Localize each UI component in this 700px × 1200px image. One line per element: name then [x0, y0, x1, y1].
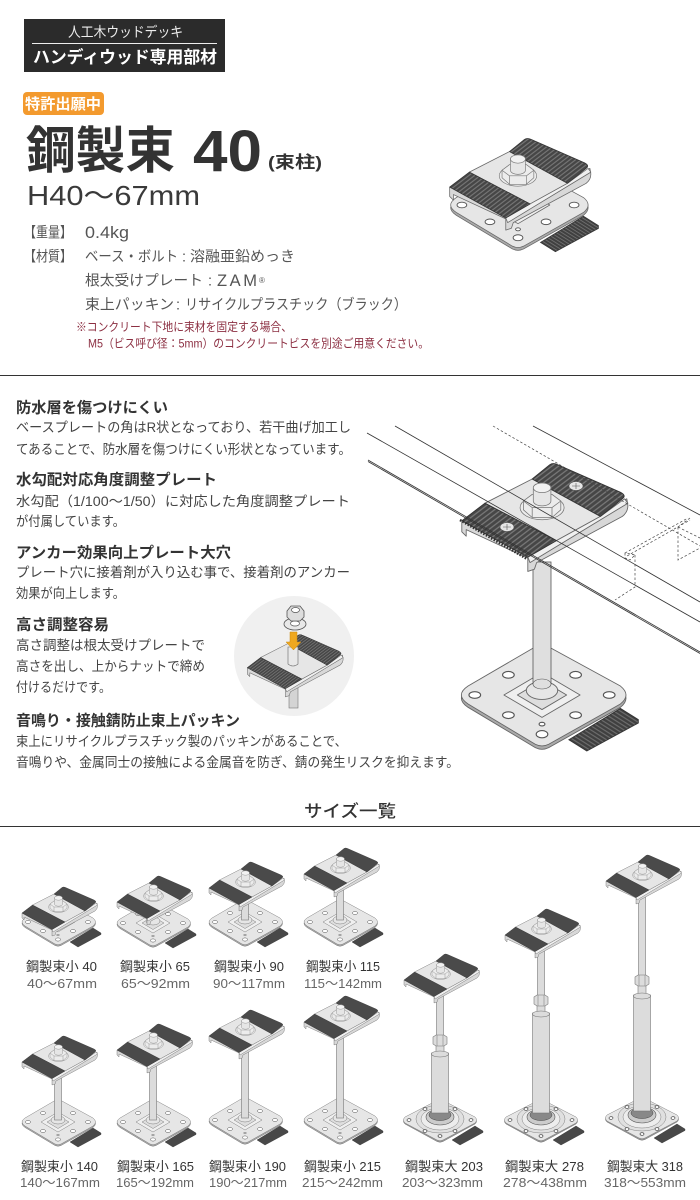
product: small 140: 鋼製束小 140 [21, 1159, 98, 1174]
feature text: anchor holes: プレート穴に接着剤が入り込む事で、接着剤のアンカー [16, 564, 350, 580]
feature text: height adjustment: 高さ調整容易 [16, 616, 109, 634]
product: small 115 [304, 848, 383, 991]
product: small 115: 鋼製束小 115 [306, 959, 380, 974]
product: small 65: 鋼製束小 65 [120, 959, 190, 974]
feature text: height adjustment: 高さ調整は根太受けプレートで [16, 637, 205, 653]
product: small 90 [209, 862, 288, 991]
spec list: リサイクルプラスチック（ブラック） [185, 296, 407, 314]
feature text: waterproof layer: ベースプレートの角はR状となっており、若干曲げ加工し [16, 420, 351, 435]
product: small 215 [302, 996, 383, 1190]
icon: height adjustment circle [234, 596, 354, 716]
spec list: ベース・ボルト [85, 248, 178, 266]
product: large 203 [402, 954, 483, 1190]
section heading: size list: サイズ一覧 [304, 801, 396, 821]
product: large 278: 278〜438mm [503, 1175, 587, 1190]
feature text: packing: 音鳴り・接触錆防止束上パッキン [16, 712, 240, 730]
spec list: : [182, 250, 186, 266]
feature text: packing [16, 712, 459, 770]
product: large 278: 鋼製束大 278 [505, 1159, 584, 1174]
header label box [24, 19, 225, 72]
product: small 190 [209, 1010, 288, 1190]
product: small 215: 215〜242mm [302, 1175, 383, 1190]
screws on pads [500, 482, 583, 532]
stem of main diagram [533, 562, 551, 689]
spec list: 根太受けプレート [85, 272, 203, 290]
header label box: ハンディウッド専用部材 [33, 47, 217, 67]
spec list: 【重量】 [24, 224, 72, 242]
feature text: slope plate [16, 470, 350, 529]
spec list: ZAM [217, 272, 257, 290]
spec list: 【材質】 [24, 248, 72, 266]
product: small 90: 90〜117mm [213, 976, 285, 991]
feature text: waterproof layer [16, 398, 351, 457]
feature text: slope plate: 水勾配対応角度調整プレート [16, 470, 217, 488]
product: large 318: 318〜553mm [604, 1175, 686, 1190]
badge: patent pending: 特許出願中 [25, 95, 101, 113]
feature text: anchor holes: アンカー効果向上プレート大穴 [16, 544, 231, 562]
feature text: packing: 束上にリサイクルプラスチック製のパッキンがあることで、 [16, 734, 347, 749]
spec list: : [176, 298, 180, 314]
title: 40 [193, 119, 262, 184]
product: large 318: 鋼製束大 318 [607, 1159, 683, 1174]
feature text: waterproof layer: 防水層を傷つけにくい [16, 398, 168, 416]
product: small 140: 140〜167mm [20, 1175, 100, 1190]
product: small 140 [20, 1036, 101, 1190]
product: small 215: 鋼製束小 215 [304, 1159, 381, 1174]
feature text: packing: 音鳴りや、金属同士の接触による金属音を防ぎ、錆の発生リスクを抑えます。 [16, 754, 459, 770]
title [26, 119, 322, 184]
spec list: 溶融亜鉛めっき [190, 248, 295, 266]
badge: patent pending [23, 92, 104, 115]
product: small 90: 鋼製束小 90 [214, 959, 284, 974]
product: small 40: 鋼製束小 40 [26, 959, 97, 974]
spec list: 束上パッキン [85, 296, 174, 314]
product: large 203: 鋼製束大 203 [405, 1159, 483, 1174]
product: small 165: 鋼製束小 165 [117, 1159, 194, 1174]
feature text: slope plate: が付属しています。 [16, 514, 125, 529]
feature text: height adjustment: 付けるだけです。 [16, 680, 111, 695]
spec list: : [208, 274, 212, 290]
header label box: 人工木ウッドデッキ [68, 24, 183, 40]
spec list: 0.4kg [85, 223, 129, 242]
title: 鋼製束 [26, 123, 175, 179]
product: small 40: 40〜67mm [27, 976, 97, 991]
product: small 40 [22, 887, 101, 991]
product: small 165: 165〜192mm [116, 1175, 194, 1190]
feature text: anchor holes: 効果が向上します。 [16, 586, 125, 601]
packing teeth on plate edge [460, 520, 527, 559]
note: M5（ビス呼び径：5mm）のコンクリートビスを別途ご用意ください。 [88, 336, 429, 350]
feature text: slope plate: 水勾配（1/100〜1/50）に対応した角度調整プレート [16, 494, 350, 509]
spec list [24, 223, 407, 314]
feature text: height adjustment: 高さを出し、上からナットで締め [16, 658, 205, 674]
height range: H40〜67mm [27, 180, 200, 211]
note [76, 320, 429, 350]
product: large 278 [503, 909, 587, 1190]
note: ※コンクリート下地に束材を固定する場合、 [76, 320, 292, 334]
product: large 203: 203〜323mm [402, 1175, 483, 1190]
product: small 165 [116, 1024, 196, 1190]
product: small 65 [117, 876, 196, 991]
product: small 65: 65〜92mm [121, 976, 190, 991]
feature text: height adjustment [16, 616, 205, 695]
diagram: installed support under joists [367, 426, 700, 751]
icon: hero product [450, 138, 598, 252]
product: small 190: 鋼製束小 190 [209, 1159, 286, 1174]
feature text: waterproof layer: てあることで、防水層を傷つけにくい形状となっています。 [16, 442, 351, 457]
title: (束柱) [268, 153, 322, 172]
feature text: anchor holes [16, 544, 350, 601]
product: small 190: 190〜217mm [209, 1175, 287, 1190]
spec list: ® [259, 276, 265, 285]
product: small 115: 115〜142mm [304, 976, 382, 991]
product: large 318 [604, 855, 686, 1190]
